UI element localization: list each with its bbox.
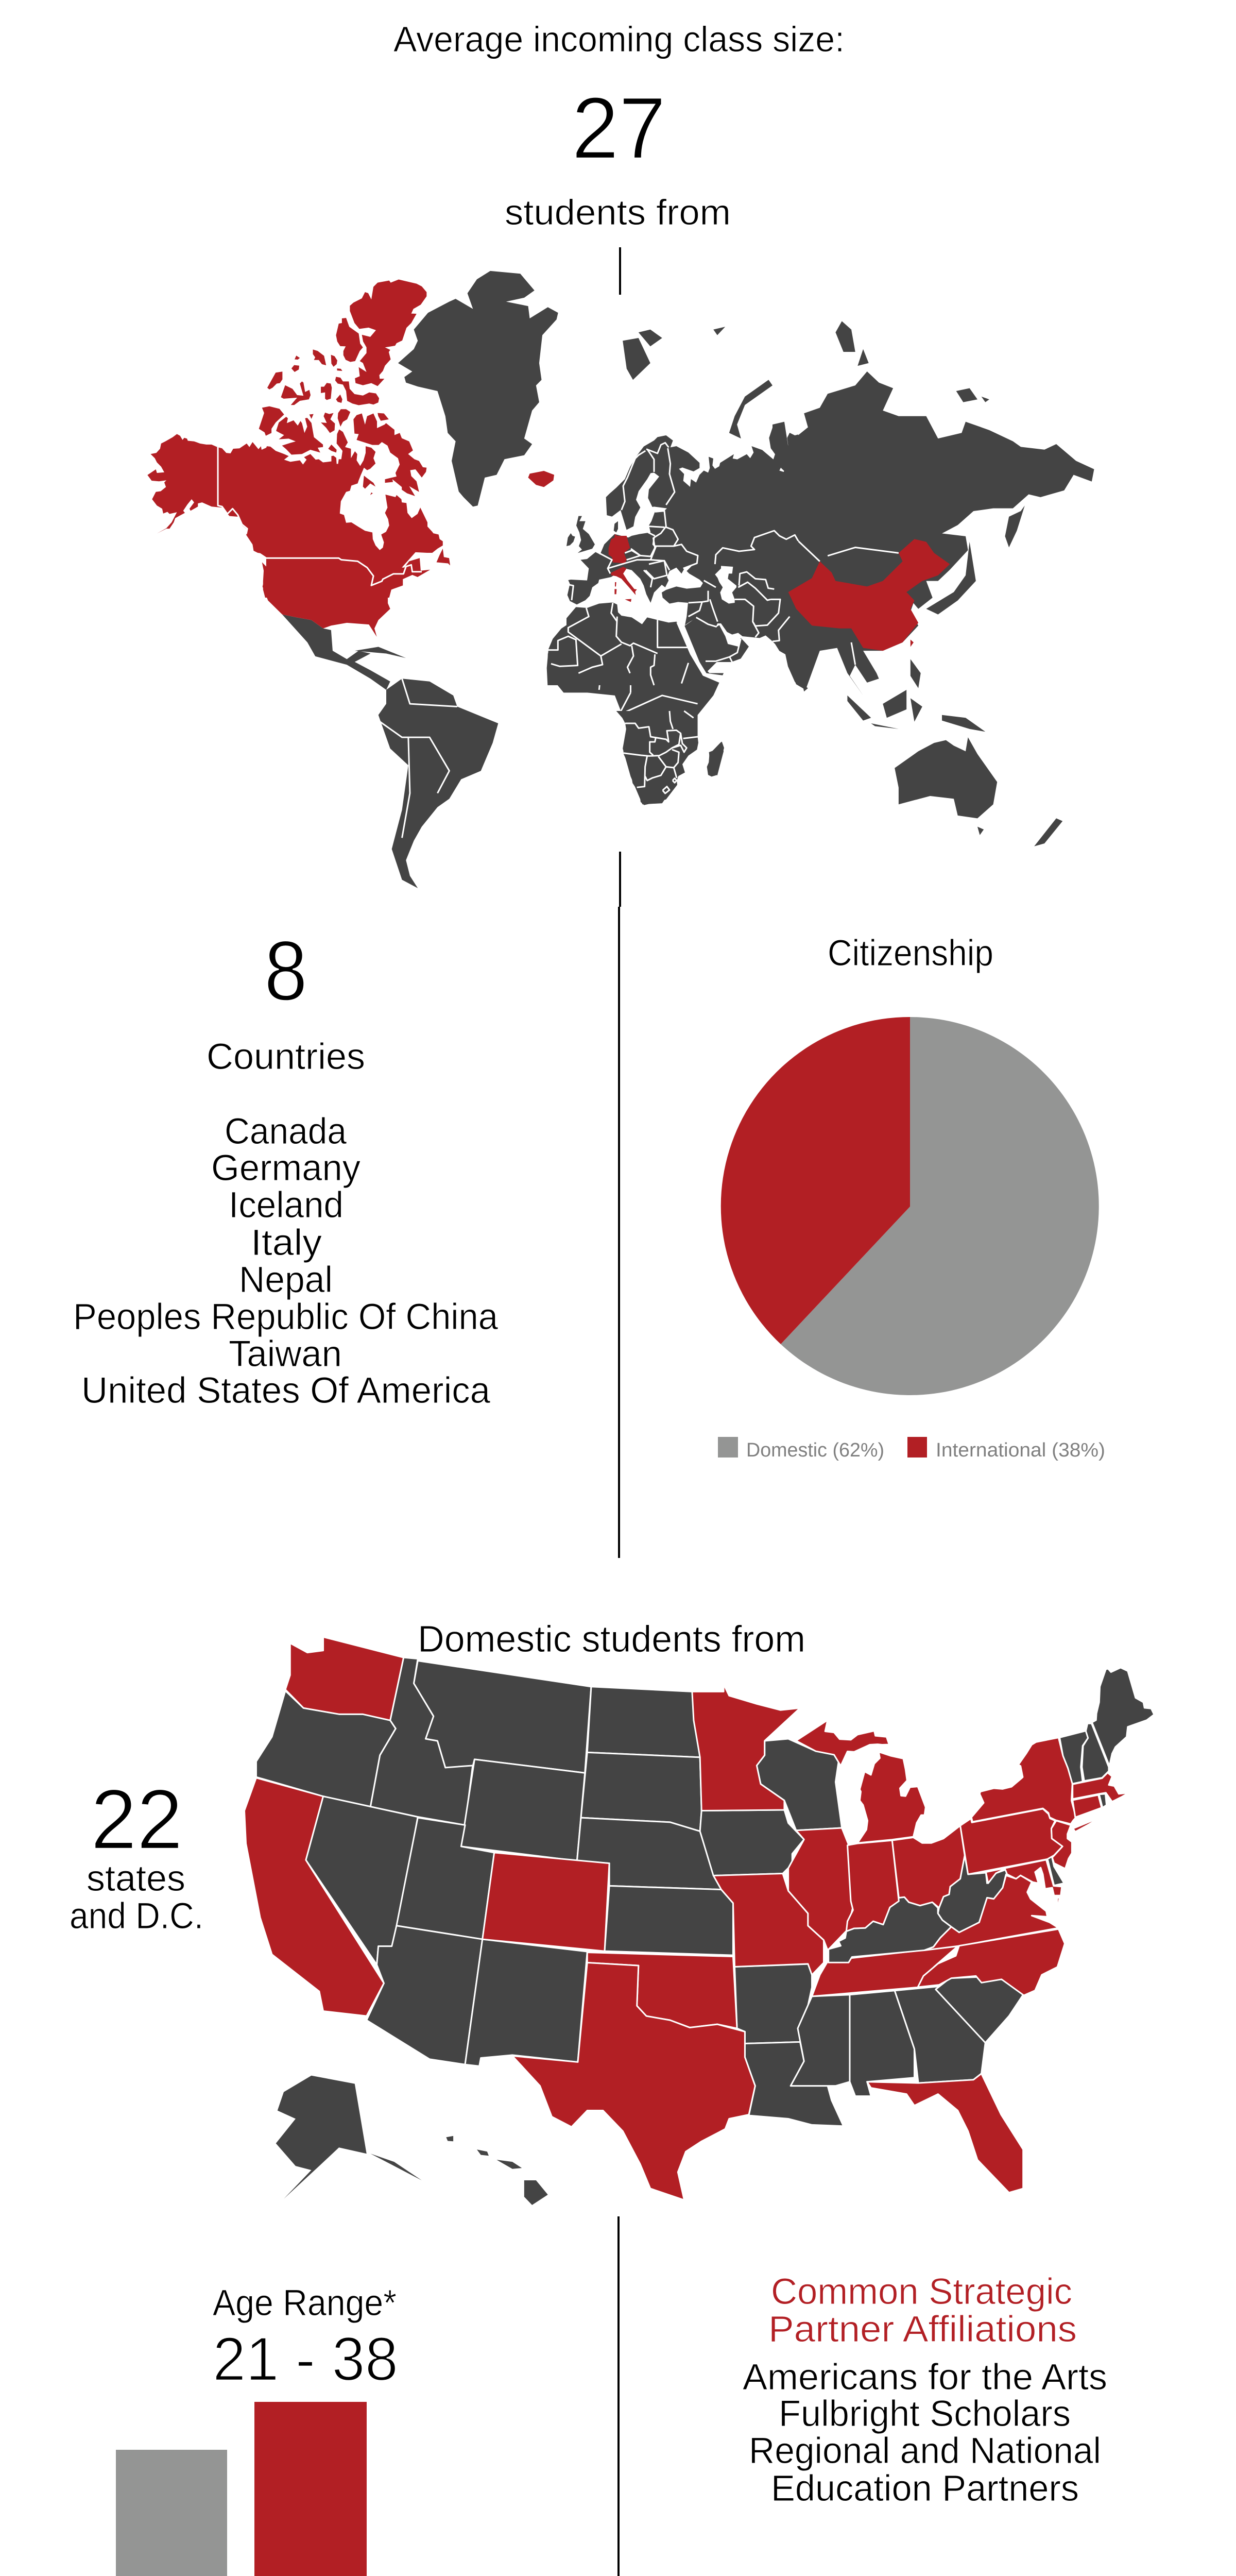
map: southern Africa xyxy=(616,711,724,805)
map: China xyxy=(788,539,950,651)
Yamal peninsula xyxy=(772,422,788,461)
legend: Domestic (62%) xyxy=(746,1439,884,1461)
panel: affiliations and majors xyxy=(691,2272,1202,2576)
big number: 27: 27 xyxy=(572,79,666,177)
heading: common strategic partner affiliations: Common Strategic xyxy=(771,2272,1072,2312)
Sumatra xyxy=(847,696,871,721)
New Zealand xyxy=(1034,818,1062,846)
heading: Age Range: Age Range* xyxy=(213,2283,397,2324)
Sulawesi xyxy=(911,698,922,722)
New Guinea xyxy=(942,715,985,732)
list of countries: Italy xyxy=(251,1223,322,1263)
world map xyxy=(147,271,1094,888)
value: 21 - 38: 21 - 38 xyxy=(213,2325,398,2394)
pie chart xyxy=(721,1017,1099,1395)
Arctic island 3 xyxy=(713,327,725,335)
list: affiliations: Regional and National xyxy=(749,2431,1101,2471)
label: Countries: Countries xyxy=(207,1037,365,1077)
list: affiliations: Americans for the Arts xyxy=(743,2357,1107,2398)
western and southern states xyxy=(244,1637,1023,2205)
divider line: age range and affiliations xyxy=(617,2216,620,2576)
callout: 22 states and D.C. xyxy=(70,1772,203,1937)
list of countries: Germany xyxy=(211,1148,360,1189)
USA south xyxy=(263,581,390,637)
Hawaii xyxy=(446,2136,548,2205)
callout: 22 states and D.C.: states xyxy=(87,1858,185,1899)
list of countries: Nepal xyxy=(239,1260,333,1300)
Denmark xyxy=(614,521,618,532)
list of countries: Canada xyxy=(225,1111,347,1152)
big number: 8: 8 xyxy=(264,923,307,1018)
list: affiliations xyxy=(743,2357,1107,2509)
Axel Heiberg Island xyxy=(336,318,363,362)
Arctic island 2 xyxy=(639,330,662,346)
Java xyxy=(871,723,899,729)
heading: average incoming class size: Average incoming class size: xyxy=(393,19,845,59)
Japan xyxy=(926,542,976,615)
Greenland xyxy=(398,271,558,506)
map: Europe and Middle East detail xyxy=(547,428,798,685)
small arctic island xyxy=(982,397,989,402)
callout: 22 states and D.C.: and D.C. xyxy=(70,1896,203,1937)
list of countries: Taiwan xyxy=(229,1334,342,1375)
Madagascar xyxy=(708,742,724,775)
Madagascar xyxy=(707,741,724,776)
New Siberian Islands xyxy=(956,388,977,402)
bar chart xyxy=(116,2402,504,2576)
Arctic islands xyxy=(259,349,389,495)
north-eastern states xyxy=(796,1668,1154,1995)
highlighted states xyxy=(244,1637,1023,2200)
Svalbard xyxy=(623,338,650,380)
Red Sea and Caspian Sea xyxy=(676,566,736,685)
Asia south-east borders xyxy=(379,539,899,838)
Newfoundland xyxy=(437,549,450,566)
Russian arctic coast island xyxy=(729,380,772,438)
legend xyxy=(718,1437,1105,1461)
Taiwan xyxy=(911,639,914,647)
connector line top xyxy=(619,247,621,295)
Great Britain xyxy=(576,516,595,553)
US map xyxy=(244,1637,1154,2205)
Germany, Italy and islands xyxy=(609,534,637,602)
panel: citizenship xyxy=(718,933,1105,1461)
southern Africa borders xyxy=(623,711,698,793)
Asia east xyxy=(777,371,1094,696)
Ellesmere Island xyxy=(350,279,426,386)
dark north-eastern states xyxy=(829,1668,1154,1962)
panel: age range xyxy=(25,2283,575,2576)
Baffin Island xyxy=(353,413,426,496)
Arabia xyxy=(681,617,749,673)
text: students from: students from xyxy=(505,192,731,232)
list: affiliations: Fulbright Scholars xyxy=(779,2394,1071,2434)
Ireland xyxy=(566,533,575,546)
South America xyxy=(379,679,498,888)
Borneo xyxy=(883,690,906,718)
heading: common strategic partner affiliations: Partner Affiliations xyxy=(768,2309,1077,2350)
Mexico and Central America xyxy=(282,615,390,690)
Philippines xyxy=(911,659,921,688)
list of countries: Iceland xyxy=(229,1185,344,1226)
Europe and west Asia xyxy=(568,428,798,685)
heading: Citizenship: Citizenship xyxy=(828,933,993,974)
Canada and Alaska borders xyxy=(218,447,422,585)
highlighted north-eastern states xyxy=(796,1720,1129,1995)
Southampton Island xyxy=(363,476,375,489)
Cuba xyxy=(355,647,406,658)
Nettilling Lake xyxy=(388,458,391,465)
heading: common strategic partner affiliations xyxy=(768,2272,1077,2350)
Novaya Zemlya xyxy=(835,321,855,352)
Africa central and south xyxy=(548,642,724,804)
North Africa xyxy=(547,602,703,685)
divider line: countries and citizenship xyxy=(618,907,620,1558)
list: affiliations: Education Partners xyxy=(771,2468,1079,2509)
dark states xyxy=(256,1657,1023,2126)
map: North America detail xyxy=(147,279,450,598)
callout: 22 states and D.C.: 22 xyxy=(91,1772,183,1867)
Europe, Africa and Asia borders xyxy=(547,443,798,685)
Tasmania xyxy=(977,827,984,835)
Alaska xyxy=(276,2076,422,2199)
Canada, Alaska and northern USA xyxy=(147,429,443,598)
connector line xyxy=(619,852,621,907)
list of countries: Peoples Republic Of China xyxy=(73,1297,498,1337)
Novaya Zemlya south xyxy=(857,349,869,366)
heading: domestic students from: Domestic students from xyxy=(418,1619,805,1660)
legend: International (38%) xyxy=(936,1439,1105,1461)
Sri Lanka xyxy=(802,684,808,691)
list of countries: United States Of America xyxy=(81,1370,491,1411)
list of countries xyxy=(73,1111,498,1411)
panel: countries xyxy=(73,923,498,1411)
map: landmasses traced at overview scale xyxy=(263,271,1094,888)
Iceland xyxy=(528,471,554,487)
Sakhalin xyxy=(1005,505,1025,548)
Australia xyxy=(895,737,997,818)
